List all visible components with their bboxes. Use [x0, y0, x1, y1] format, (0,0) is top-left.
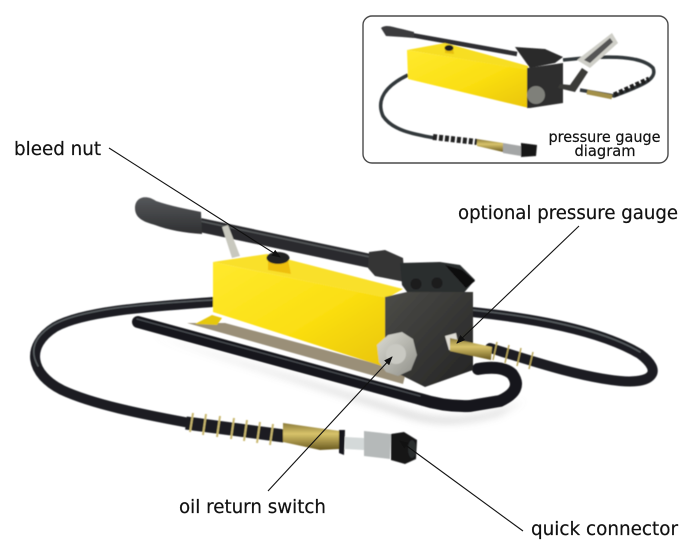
label: quick connector: quick connector — [531, 518, 678, 540]
base plate — [187, 323, 405, 384]
handle lever — [135, 197, 475, 302]
inset pump — [381, 26, 654, 157]
yellow reservoir — [213, 254, 403, 368]
inset gauge — [577, 33, 618, 68]
inset caption: pressure gauge — [548, 128, 660, 146]
base frame — [137, 319, 516, 406]
inset block — [527, 63, 563, 108]
inset connector — [433, 137, 477, 142]
label: bleed nut: bleed nut — [14, 138, 101, 160]
hydraulic hose: left loop — [34, 300, 213, 424]
pump block — [385, 292, 473, 387]
oil return knob — [377, 332, 417, 376]
main pump illustration — [34, 197, 653, 464]
inset hose — [381, 75, 435, 138]
label: quick connector — [400, 441, 678, 540]
label: oil return switch — [179, 357, 392, 518]
ground shadow — [150, 335, 525, 423]
label: optional pressure gauge — [457, 202, 678, 343]
inset panel: pressure gauge diagram: diagram — [574, 142, 636, 160]
bleed nut — [266, 252, 291, 274]
label: oil return switch: oil return switch — [179, 496, 326, 518]
inset lever — [400, 33, 517, 54]
hydraulic hose: right loop — [472, 310, 653, 381]
inset reservoir — [407, 43, 528, 70]
outlet fitting with spring — [445, 333, 533, 369]
hose spring and quick connector — [186, 413, 417, 464]
inset panel: pressure gauge diagram — [363, 16, 668, 163]
inset knob — [527, 86, 545, 104]
label: optional pressure gauge: optional pressure gauge — [458, 202, 678, 224]
label: bleed nut — [14, 138, 280, 257]
